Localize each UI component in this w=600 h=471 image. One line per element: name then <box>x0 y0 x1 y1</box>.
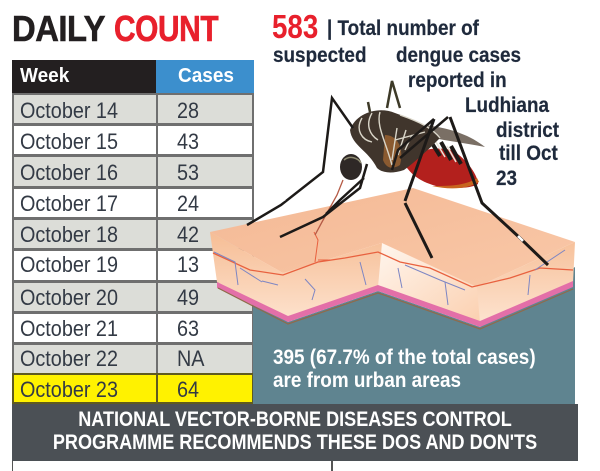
row: October 16: 53 <box>177 160 199 185</box>
row: October 15: 43 <box>177 129 199 154</box>
title: daily count: COUNT <box>114 8 218 49</box>
row: October 23 highlighted: October 23 <box>20 377 118 402</box>
description line 7: till Oct <box>499 142 558 165</box>
row: October 14 <box>12 93 254 125</box>
mosquito legs <box>247 98 353 225</box>
row: October 14: October 14 <box>20 98 118 123</box>
row: October 14: 28 <box>177 98 199 123</box>
row: October 18: 42 <box>177 222 199 247</box>
row: October 21 <box>12 312 254 344</box>
table header <box>12 60 254 93</box>
row: October 23 highlighted <box>12 373 254 404</box>
row: October 19 <box>12 249 254 282</box>
stat number: 583 <box>272 8 318 45</box>
title: daily count <box>12 8 219 49</box>
table: weekly cases <box>12 60 254 404</box>
title: daily count: DAILY <box>12 8 105 49</box>
table header: Cases <box>178 65 234 87</box>
skin block <box>210 188 575 329</box>
row: October 20: October 20 <box>20 285 118 310</box>
description line 1: | Total number of <box>327 17 479 40</box>
row: October 22: NA <box>177 346 205 371</box>
banner: programme recommendations: PROGRAMME RECOMMENDS THESE DOS AND DON'TS <box>53 431 537 454</box>
mosquito abdomen <box>405 149 478 188</box>
row: October 21: 63 <box>177 316 199 341</box>
banner: programme recommendations: NATIONAL VECTOR-BORNE DISEASES CONTROL <box>78 408 512 431</box>
row: October 19: 13 <box>177 252 199 277</box>
description line 3: dengue cases <box>396 44 521 67</box>
mosquito wing <box>420 125 485 147</box>
banner: programme recommendations <box>12 404 578 461</box>
row: October 18 <box>12 218 254 250</box>
row: October 19: October 19 <box>20 252 118 277</box>
urban cases note: 395 (67.7% of the total cases) <box>273 346 536 369</box>
row: October 16: October 16 <box>20 160 118 185</box>
bottom table stub <box>12 461 578 471</box>
row: October 22: October 22 <box>20 346 118 371</box>
row: October 18: October 18 <box>20 222 118 247</box>
row: October 20: 49 <box>177 285 199 310</box>
urban cases note <box>273 346 536 392</box>
row: October 21: October 21 <box>20 316 118 341</box>
row: October 20 <box>12 281 254 313</box>
row: October 23 highlighted: 64 <box>177 377 199 402</box>
row: October 22 <box>12 343 254 374</box>
row: October 16 <box>12 155 254 188</box>
row: October 17: October 17 <box>20 191 118 216</box>
teal panel <box>253 267 575 404</box>
description line 4: reported in <box>408 69 507 92</box>
mosquito <box>247 81 548 265</box>
row: October 17 <box>12 187 254 219</box>
description line 8: 23 <box>496 167 517 190</box>
table header: Week <box>20 65 69 87</box>
mosquito head <box>340 154 362 180</box>
description line 2: suspected <box>273 44 366 67</box>
urban cases note: are from urban areas <box>273 369 461 392</box>
description line 6: district <box>496 119 559 142</box>
mosquito thorax <box>350 110 440 172</box>
stat: 583 suspected cases <box>272 8 559 190</box>
description line 5: Ludhiana <box>465 94 549 117</box>
row: October 15: October 15 <box>20 129 118 154</box>
row: October 17: 24 <box>177 191 199 216</box>
mosquito proboscis <box>315 180 343 235</box>
row: October 15 <box>12 124 254 156</box>
